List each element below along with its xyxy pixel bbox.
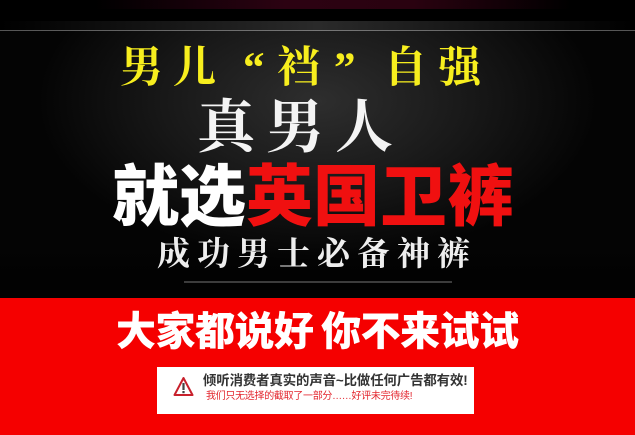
dark panel: main headline background [0, 21, 635, 298]
heading: yellow slogan [120, 45, 481, 92]
banner heading: 大家都说好 你不来试试 [116, 310, 519, 354]
heading: yellow slogan: ” [334, 45, 356, 92]
heading: yellow slogan: 儿 [173, 45, 216, 92]
heading: real man: 真男人 [197, 95, 404, 160]
callout: white notice box [157, 367, 474, 414]
heading: yellow slogan: 自 [384, 45, 427, 92]
subheading: essential underwear: 成功男士必备神裤 [157, 237, 477, 273]
notice main text: 倾听消费者真实的声音~比做任何广告都有效! [203, 373, 468, 388]
panel: red banner [0, 298, 635, 435]
top maroon strip [0, 0, 635, 9]
heading: choose British underwear: 就选英国卫裤 [112, 160, 514, 235]
heading: yellow slogan: “ [243, 45, 264, 92]
heading: yellow slogan: 男 [120, 45, 163, 92]
fine print [184, 281, 452, 283]
heading: yellow slogan: 裆 [277, 45, 320, 92]
heading: yellow slogan: 强 [438, 45, 481, 92]
icon: warning triangle [174, 377, 194, 396]
notice sub text: 我们只无选择的截取了一部分……好评未完待续! [206, 391, 412, 402]
